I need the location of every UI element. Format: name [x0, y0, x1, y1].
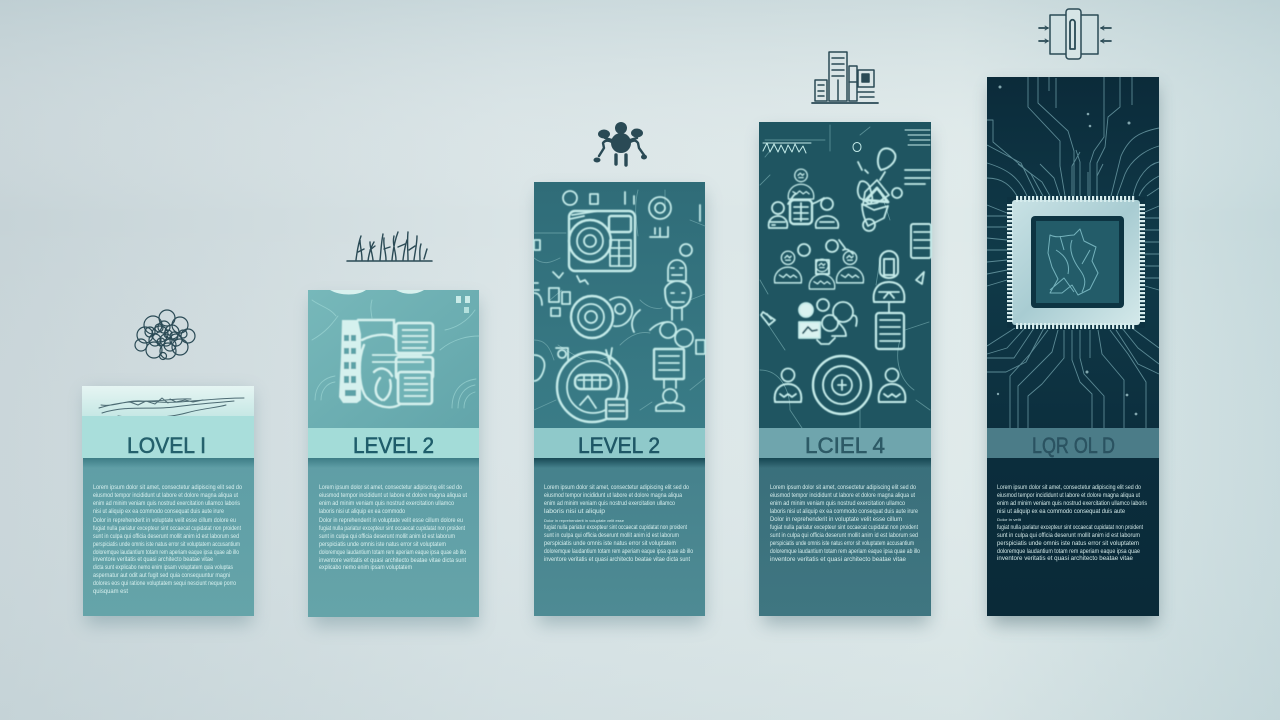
level 3 text card — [534, 458, 705, 616]
level 1 text card: dolores eos qui ratione voluptatem sequi nesciunt neque porro — [93, 580, 236, 587]
level 2 text card: Dolor in reprehenderit in voluptate velit esse cillum dolore eu — [319, 517, 463, 524]
level 4 text card: Lorem ipsum dolor sit amet, consectetur adipiscing elit sed do — [770, 484, 916, 491]
level 4 text card: fugiat nulla pariatur excepteur sint occaecat cupidatat non proident — [770, 524, 918, 531]
level 2 text card: fugiat nulla pariatur excepteur sint occaecat cupidatat non proident — [319, 525, 465, 532]
level 2 text card: eiusmod tempor incididunt ut labore et dolore magna aliqua ut — [319, 492, 467, 499]
level 2 band — [308, 428, 479, 458]
level 4 text card: eiusmod tempor incididunt ut labore et dolore magna aliqua ut — [770, 492, 915, 499]
level 2 text card: Lorem ipsum dolor sit amet, consectetur adipiscing elit sed do — [319, 484, 462, 491]
level 3 text card: sunt in culpa qui officia deserunt mollit anim id est laborum — [544, 532, 679, 539]
panel: level 2 — [308, 290, 479, 626]
level 5 text card: sunt in culpa qui officia deserunt mollit anim id est laborum — [997, 532, 1140, 539]
icon: grass scribble — [347, 232, 432, 261]
level 5 text card: Dolor in velit — [997, 518, 1021, 522]
level 1 text card — [83, 458, 254, 616]
level 1 text card: aspernatur aut odit aut fugit sed quia consequuntur magni — [93, 572, 230, 579]
level 3 text card: Lorem ipsum dolor sit amet, consectetur adipiscing elit sed do — [544, 484, 689, 491]
panel: level 1 — [82, 386, 254, 624]
level 2 text card: enim ad minim veniam quis nostrud exercitation ullamco — [319, 500, 454, 507]
level 3 text card: fugiat nulla pariatur excepteur sint occaecat cupidatat non proident — [544, 524, 687, 531]
level 2 text card: doloremque laudantium totam rem aperiam eaque ipsa quae ab illo — [319, 549, 466, 556]
panel: level 3 — [534, 182, 705, 624]
level 2 band: LEVEL 2 — [353, 433, 434, 458]
level 4 text card: enim ad minim veniam quis nostrud exercitation ullamco — [770, 500, 905, 507]
level 5 text card: Lorem ipsum dolor sit amet, consectetur adipiscing elit sed do — [997, 484, 1141, 491]
level 1 text card: Dolor in reprehenderit in voluptate velit esse cillum dolore eu — [93, 517, 236, 524]
level 3 chalkboard artwork — [534, 182, 705, 430]
level 4 text card: inventore veritatis et quasi architecto beatae vitae — [770, 556, 907, 563]
level 4 band — [759, 428, 931, 458]
level 3 text card: laboris nisi ut aliquip — [544, 508, 606, 515]
level 1 text card: perspiciatis unde omnis iste natus error sit voluptatem accusantium — [93, 541, 240, 548]
level 2 text card: laboris nisi ut aliquip ex ea commodo — [319, 508, 405, 515]
level 5 text card: eiusmod tempor incididunt ut labore et dolore magna aliqua ut — [997, 492, 1140, 499]
level 4 text card: doloremque laudantium totam rem aperiam eaque ipsa quae ab illo — [770, 548, 920, 555]
level 2 text card: sunt in culpa qui officia deserunt mollit anim id est laborum — [319, 533, 455, 540]
level 1 band — [82, 416, 254, 458]
level 5 text card — [987, 458, 1159, 616]
panel: level 4 — [759, 122, 931, 624]
panel: level 5 — [987, 77, 1159, 624]
level 3 text card: perspiciatis unde omnis iste natus error sit voluptatem — [544, 540, 676, 547]
level 4 text card — [759, 458, 931, 616]
level 1 text card: nisi ut aliquip ex ea commodo consequat duis aute irure — [93, 508, 224, 515]
level 5 text card: fugiat nulla pariatur excepteur sint occaecat cupidatat non proident — [997, 524, 1143, 531]
level 5 text card: perspiciatis unde omnis iste natus error sit voluptatem — [997, 540, 1139, 547]
level 4 text card: Dolor in reprehenderit in voluptate velit esse cillum — [770, 516, 902, 523]
icon: network of people — [594, 122, 647, 165]
level 1 band: LOVEL I — [127, 433, 206, 458]
level 4 text card: perspiciatis unde omnis iste natus error sit voluptatem accusantium — [770, 540, 914, 547]
level 1 text card: enim ad minim veniam quis nostrud exercitation ullamco laboris — [93, 500, 240, 507]
level 1 text card: fugiat nulla pariatur excepteur sint occaecat cupidatat non proident — [93, 525, 241, 532]
level 2 text card: perspiciatis unde omnis iste natus error sit voluptatem — [319, 541, 446, 548]
level 5 band — [987, 428, 1159, 458]
level 5 circuit artwork — [987, 77, 1159, 430]
level 3 band: LEVEL 2 — [578, 433, 660, 458]
icon: server capsule with arrows — [1039, 9, 1111, 59]
level 2 text card: inventore veritatis et quasi architecto beatae vitae dicta sunt — [319, 557, 466, 564]
level 3 text card: eiusmod tempor incididunt ut labore et dolore magna aliqua — [544, 492, 682, 499]
level 2 machine doodle — [339, 320, 433, 407]
level 5 text card: doloremque laudantium totam rem aperiam eaque ipsa quae — [997, 548, 1140, 555]
level 3 text card: doloremque laudantium totam rem aperiam eaque ipsa quae ab illo — [544, 548, 693, 555]
level 1 text card: quisquam est — [93, 588, 128, 595]
level 1 sketch header — [82, 386, 254, 418]
level 2 text card — [308, 458, 479, 617]
icon: tangled scribble — [135, 310, 195, 360]
level 4 text card: laboris nisi ut aliquip ex ea commodo consequat duis aute irure — [770, 508, 918, 515]
sketch notes top — [763, 130, 930, 153]
level 1 text card: doloremque laudantium totam rem aperiam eaque ipsa quae ab illo — [93, 549, 239, 556]
level 3 text card: Dolor in reprehenderit in voluptate velit esse — [544, 518, 625, 523]
level 4 text card: sunt in culpa qui officia deserunt mollit anim id est laborum sed — [770, 532, 918, 539]
level 4 band: LCIEL 4 — [805, 433, 885, 458]
level 4 chalkboard artwork — [759, 122, 931, 430]
level 1 text card: eiusmod tempor incididunt ut labore et dolore magna aliqua ut — [93, 492, 238, 499]
level 5 text card: inventore veritatis et quasi architecto beatae vitae — [997, 555, 1134, 562]
people and network doodles — [761, 148, 931, 414]
level 2 text card: explicabo nemo enim ipsam voluptatem — [319, 564, 412, 571]
level 1 text card: sunt in culpa qui officia deserunt mollit anim id est laborum sed — [93, 533, 239, 540]
level 5 band: LQR OL D — [1032, 433, 1115, 458]
level 3 band — [534, 428, 705, 458]
level 1 text card: inventore veritatis et quasi architecto beatae vitae — [93, 556, 213, 563]
level 3 text card: enim ad minim veniam quis nostrud exercitation ullamco — [544, 500, 675, 507]
level 5 text card: enim ad minim veniam quis nostrud exercitation ullamco laboris — [997, 500, 1147, 507]
level 1 text card: dicta sunt explicabo nemo enim ipsam voluptatem quia voluptas — [93, 564, 233, 571]
level 5 text card: nisi ut aliquip ex ea commodo consequat duis aute — [997, 508, 1126, 515]
level 2 sketch artwork — [308, 290, 479, 430]
chalk doodles — [534, 191, 705, 422]
level 1 text card: Lorem ipsum dolor sit amet, consectetur adipiscing elit sed do — [93, 484, 242, 491]
microchip — [1007, 197, 1145, 328]
level 3 text card: inventore veritatis et quasi architecto beatae vitae dicta sunt — [544, 556, 690, 563]
icon: buildings — [812, 52, 878, 103]
circuit traces — [987, 77, 1159, 430]
